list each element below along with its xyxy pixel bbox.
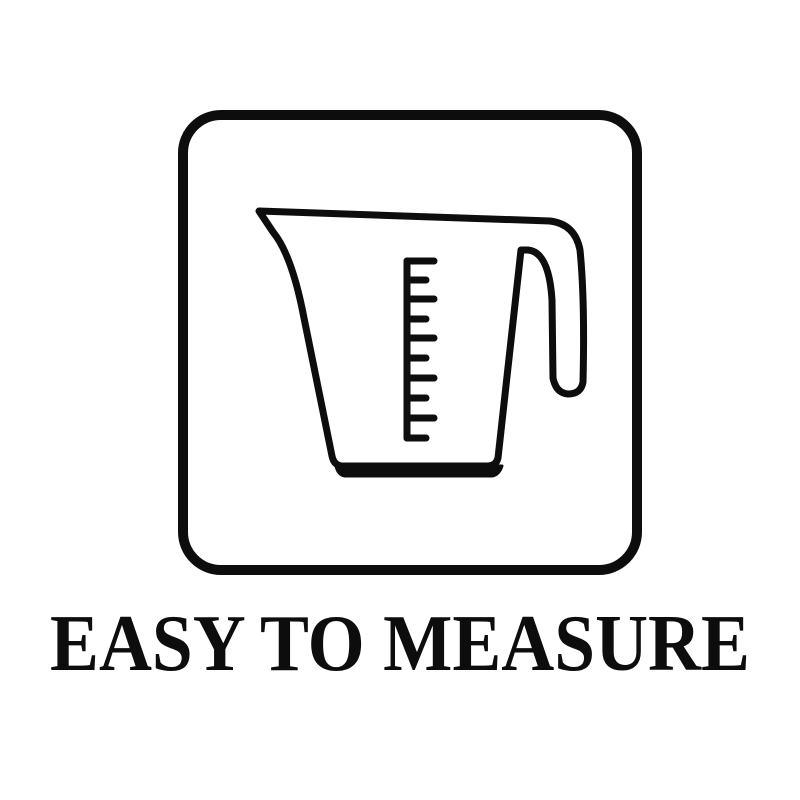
icon frame: rounded square [183,115,637,570]
cup base [336,466,502,476]
title: EASY TO MEASURE [50,600,750,688]
measurement scale [407,261,434,438]
icon: measuring cup [259,211,584,476]
